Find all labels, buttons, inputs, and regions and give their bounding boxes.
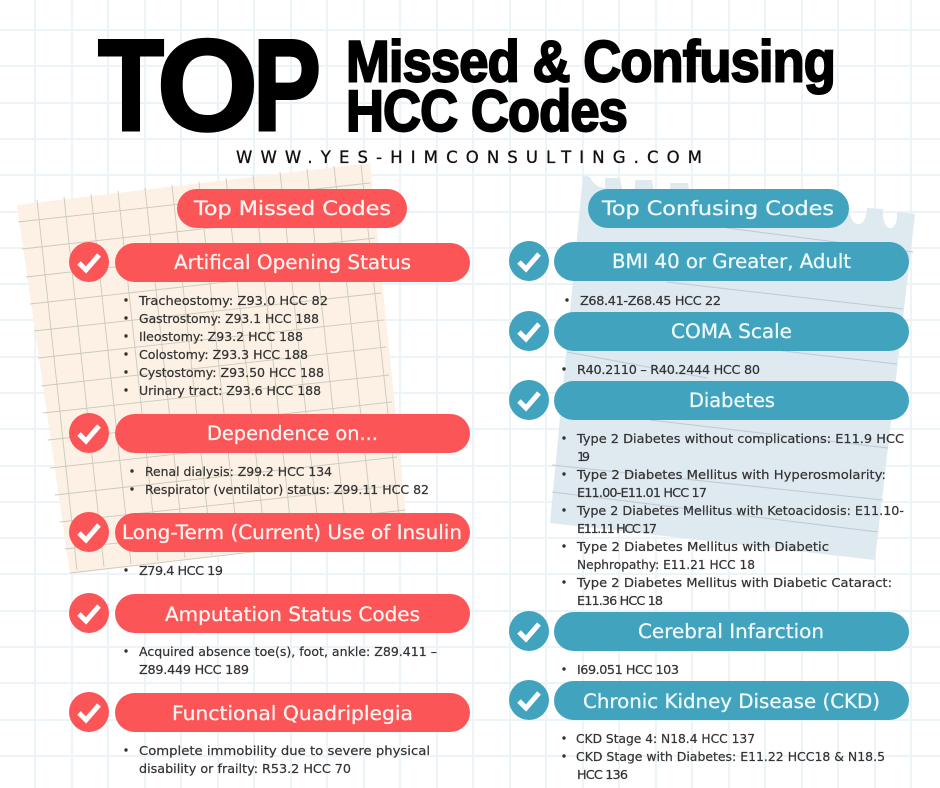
list: bmi code: Z68.41-Z68.45 HCC 22 <box>580 294 721 309</box>
icon: check <box>69 593 109 633</box>
panel: blue torn paper <box>550 175 915 560</box>
list: coma code: R40.2110 – R40.2444 HCC 80 <box>577 363 760 378</box>
heading: top missed codes <box>177 189 407 228</box>
heading: coma scale: COMA Scale <box>671 320 792 343</box>
list: diabetes codes: Type 2 Diabetes Mellitus with Hyperosmolarity: <box>576 468 886 483</box>
section: cerebral infarction <box>509 611 909 678</box>
icon: check <box>509 680 549 720</box>
icon: check <box>69 413 109 453</box>
list: artificial opening codes: Urinary tract: Z93.6 HCC 188 <box>139 384 321 399</box>
heading: dependence on: Dependence on... <box>207 422 378 445</box>
list: diabetes codes: Type 2 Diabetes without complications: E11.9 HCC <box>576 432 904 447</box>
heading: amputation status codes: Amputation Status Codes <box>165 603 420 626</box>
title: HCC Codes <box>346 79 627 144</box>
list: cerebral code: I69.051 HCC 103 <box>577 663 679 678</box>
heading: diabetes <box>554 381 909 420</box>
heading: long-term insulin <box>115 513 470 552</box>
list: diabetes codes: Type 2 Diabetes Mellitus with Diabetic Cataract: <box>576 576 892 591</box>
heading: functional quadriplegia: Functional Quadriplegia <box>172 702 413 725</box>
list: diabetes codes: E11.36 HCC 18 <box>577 594 663 609</box>
heading: dependence on <box>115 414 470 453</box>
icon: check <box>509 241 549 281</box>
heading: functional quadriplegia <box>115 693 470 732</box>
list: amputation codes <box>124 645 437 678</box>
list: ckd codes: CKD Stage with Diabetes: E11.22 HCC18 & N18.5 <box>576 750 885 765</box>
section: artificial opening status <box>69 242 470 399</box>
list: artificial opening codes: Tracheostomy: Z93.0 HCC 82 <box>138 294 328 309</box>
list: ckd codes: HCC 136 <box>577 768 628 783</box>
icon: check <box>509 311 549 351</box>
heading: long-term insulin: Long-Term (Current) Use of Insulin <box>122 521 462 544</box>
panel: beige grid paper <box>17 163 408 574</box>
heading: top missed codes: Top Missed Codes <box>193 197 391 220</box>
heading: chronic kidney disease: Chronic Kidney Disease (CKD) <box>583 690 880 713</box>
title: P <box>253 12 321 158</box>
list: diabetes codes: E11.00-E11.01 HCC 17 <box>577 486 707 501</box>
list: diabetes codes: Type 2 Diabetes Mellitus with Diabetic <box>576 540 829 555</box>
right column: top confusing codes <box>509 189 909 783</box>
list: artificial opening codes: Colostomy: Z93.3 HCC 188 <box>139 348 308 363</box>
heading: top confusing codes: Top Confusing Codes <box>601 197 834 220</box>
title: T <box>98 12 164 158</box>
icon: check <box>69 242 109 282</box>
icon: check <box>509 611 549 651</box>
section: chronic kidney disease <box>509 680 909 783</box>
list: artificial opening codes: Ileostomy: Z93.2 HCC 188 <box>139 330 303 345</box>
list: artificial opening codes: Cystostomy: Z93.50 HCC 188 <box>139 366 324 381</box>
icon: check <box>69 512 109 552</box>
list: quadriplegia code: Complete immobility due to severe physical <box>139 744 430 759</box>
heading: amputation status codes <box>115 594 470 633</box>
title: Missed & Confusing <box>346 30 835 94</box>
heading: bmi <box>554 242 909 281</box>
heading: top confusing codes <box>588 189 849 228</box>
section: dependence on <box>69 413 470 498</box>
section: functional quadriplegia <box>69 692 470 777</box>
section: diabetes <box>509 380 909 609</box>
list: ckd codes <box>562 732 885 783</box>
icon: check <box>69 692 109 732</box>
list: diabetes codes <box>562 432 904 609</box>
list: amputation codes: Z89.449 HCC 189 <box>139 663 249 678</box>
list: amputation codes: Acquired absence toe(s), foot, ankle: Z89.411 – <box>139 645 437 660</box>
list: diabetes codes: 19 <box>577 450 590 465</box>
website url: WWW.YES-HIMCONSULTING.COM <box>236 148 702 167</box>
list: artificial opening codes <box>124 294 328 399</box>
title: O <box>157 12 258 158</box>
list: artificial opening codes: Gastrostomy: Z93.1 HCC 188 <box>139 312 319 327</box>
heading: diabetes: Diabetes <box>689 389 775 412</box>
section: amputation status <box>69 593 470 678</box>
list: quadriplegia code <box>124 744 430 777</box>
list: dependence codes: Renal dialysis: Z99.2 HCC 134 <box>145 465 332 480</box>
heading: chronic kidney disease <box>554 681 909 720</box>
heading: cerebral infarction: Cerebral Infarction <box>638 620 824 643</box>
list: ckd codes: CKD Stage 4: N18.4 HCC 137 <box>576 732 755 747</box>
list: insulin code: Z79.4 HCC 19 <box>139 564 223 579</box>
heading: bmi: BMI 40 or Greater, Adult <box>612 250 851 273</box>
section: long-term insulin <box>69 512 470 579</box>
list: diabetes codes: E11.11 HCC 17 <box>577 522 657 537</box>
heading: cerebral infarction <box>554 612 909 651</box>
section: coma scale <box>509 311 909 378</box>
heading: artifical opening status <box>115 243 470 282</box>
list: diabetes codes: Nephropathy: E11.21 HCC 18 <box>577 558 755 573</box>
list: diabetes codes: Type 2 Diabetes Mellitus with Ketoacidosis: E11.10- <box>576 504 904 519</box>
heading: coma scale <box>554 312 909 351</box>
list: quadriplegia code: disability or frailty: R53.2 HCC 70 <box>139 762 351 777</box>
icon: check <box>509 380 549 420</box>
title <box>98 12 835 158</box>
section: bmi <box>509 241 909 309</box>
left column: top missed codes <box>69 189 470 777</box>
heading: artifical opening status: Artifical Opening Status <box>174 251 411 274</box>
list: dependence codes <box>130 465 429 498</box>
list: dependence codes: Respirator (ventilator) status: Z99.11 HCC 82 <box>145 483 429 498</box>
